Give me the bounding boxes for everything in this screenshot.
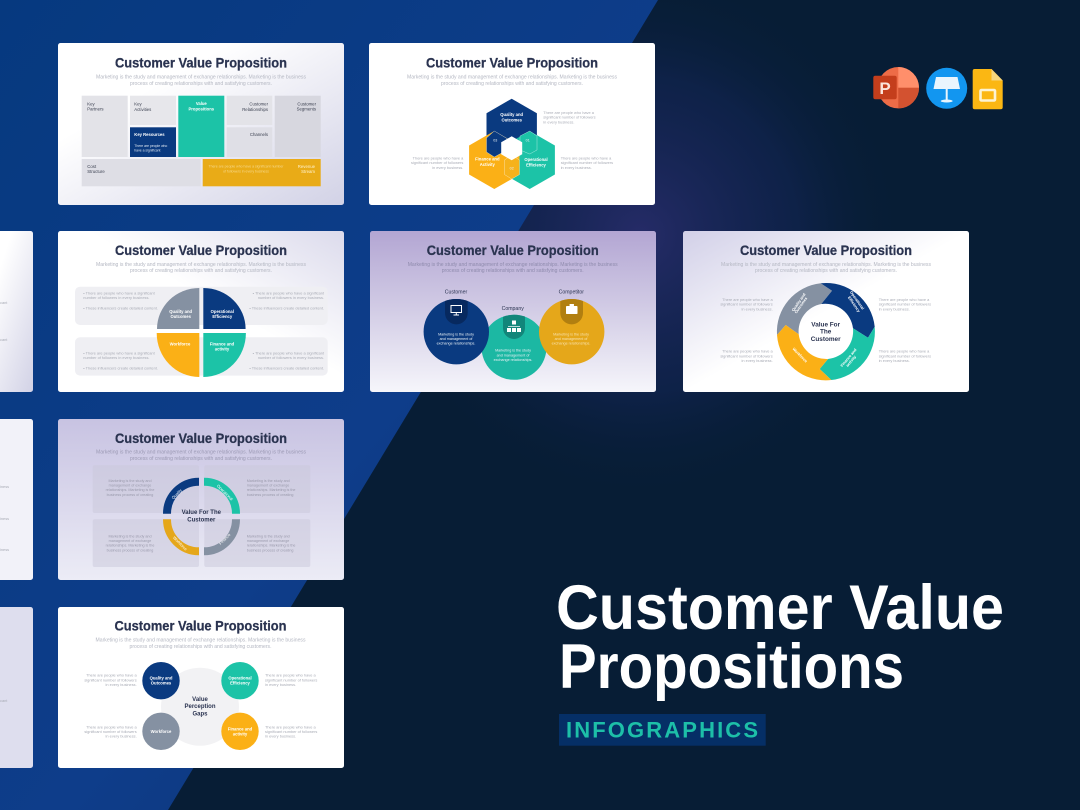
slide title: Customer Value Proposition bbox=[114, 618, 286, 634]
slide subtitle bbox=[96, 638, 306, 650]
arc: workforce bbox=[167, 519, 199, 551]
note text: management of exchange bbox=[109, 539, 151, 543]
notes: significant number of followers bbox=[265, 729, 317, 734]
main title bbox=[556, 573, 1004, 702]
canvas: key partners: Partners bbox=[87, 106, 104, 112]
pie labels: Operational bbox=[211, 309, 234, 314]
hexagon labels: Activity bbox=[480, 162, 496, 167]
partial slide: left row 3 bbox=[0, 419, 33, 580]
circle: customer: and management of bbox=[440, 337, 473, 341]
ring notes bbox=[720, 297, 931, 363]
canvas: key activities: Key bbox=[134, 102, 143, 106]
hexagon notes: in every business. bbox=[543, 119, 574, 124]
main title: Propositions bbox=[559, 632, 904, 702]
circle: workforce: Workforce bbox=[151, 729, 172, 734]
ring labels: Operational bbox=[849, 290, 865, 310]
center label: Perception bbox=[184, 704, 216, 710]
center label: Value bbox=[192, 697, 208, 703]
ring: quality and outcomes bbox=[777, 283, 832, 335]
canvas: customer relationships: Customer bbox=[249, 102, 269, 106]
hexagon labels: Outcomes bbox=[501, 118, 523, 122]
slide subtitle: process of creating relationships with and satisfying customers. bbox=[130, 81, 272, 87]
note text: business process of creating bbox=[247, 493, 293, 497]
notes bbox=[84, 673, 317, 739]
hexagon labels: 01 bbox=[526, 138, 530, 142]
partial slide: left row 4 bbox=[0, 607, 33, 768]
slide subtitle: Marketing is the study and management of exchange relationships. Marketing is the business bbox=[96, 638, 306, 644]
canvas: revenue streams: Stream bbox=[301, 169, 315, 174]
canvas: value propositions: Value bbox=[196, 101, 207, 106]
notes: There are people who have a bbox=[86, 673, 138, 678]
arc center label: Value For The bbox=[182, 510, 222, 516]
ring center label: The bbox=[820, 329, 832, 336]
circle: operational efficiency bbox=[221, 662, 259, 699]
arc labels: Quality bbox=[170, 488, 183, 500]
note text: Marketing is the study and bbox=[247, 479, 290, 483]
circle: workforce bbox=[142, 713, 180, 750]
circle headings bbox=[445, 290, 584, 312]
ring labels: Quality and bbox=[790, 292, 807, 312]
canvas: cost structure bbox=[82, 159, 201, 186]
circle: customer bbox=[424, 295, 489, 364]
note text bbox=[106, 479, 295, 552]
hexagon notes: in every business. bbox=[561, 165, 592, 170]
notes: There are people who have a bbox=[265, 673, 316, 678]
notes: in every business. bbox=[265, 734, 296, 739]
slide title: Customer Value Proposition bbox=[740, 243, 912, 258]
ring: operational efficiency bbox=[821, 283, 875, 338]
hexagon overlaps bbox=[486, 131, 537, 179]
pie: operational efficiency bbox=[203, 288, 246, 329]
icon: powerpoint: P bbox=[879, 79, 891, 98]
note text: management of exchange bbox=[247, 539, 289, 543]
canvas: key partners: Key bbox=[87, 102, 96, 106]
circle: competitor bbox=[539, 295, 604, 364]
arc labels: Workforce bbox=[172, 535, 189, 552]
infographics badge: INFOGRAPHICS bbox=[566, 718, 758, 743]
icon: keynote bbox=[926, 68, 967, 109]
hexagon labels: Finance and bbox=[475, 156, 500, 162]
note text: business process of creating bbox=[107, 548, 153, 552]
canvas: cost structure: Cost bbox=[87, 164, 97, 169]
canvas: value propositions: Propositions bbox=[189, 106, 215, 112]
icon: powerpoint bbox=[873, 67, 919, 108]
slide subtitle bbox=[407, 74, 617, 87]
canvas: key resources: have a significant bbox=[134, 148, 161, 152]
ring labels: activity bbox=[845, 354, 858, 368]
ring notes: There are people who have a bbox=[879, 349, 930, 354]
arc: quality bbox=[167, 482, 199, 514]
ring notes: significant number of followers bbox=[720, 302, 773, 307]
note text: relationships. Marketing is the bbox=[106, 544, 154, 548]
canvas: key partners bbox=[82, 96, 128, 157]
arc center label: Customer bbox=[187, 518, 216, 524]
ring notes: significant number of followers bbox=[879, 353, 931, 358]
canvas: channels: Channels bbox=[250, 132, 268, 137]
note text: • There are people who have a significant bbox=[83, 350, 156, 355]
ring notes: in every business. bbox=[742, 358, 773, 363]
pie: workforce bbox=[157, 333, 199, 377]
slide subtitle bbox=[96, 450, 306, 462]
slide: overlapping circles bbox=[370, 231, 656, 392]
center label: Gaps bbox=[192, 711, 208, 717]
pie labels bbox=[169, 309, 235, 352]
ring labels: Workforce bbox=[792, 346, 809, 364]
slide: quarter arcs bbox=[58, 419, 344, 580]
canvas: revenue streams: of followers in every business bbox=[223, 170, 269, 174]
canvas: channels bbox=[227, 127, 272, 157]
slide subtitle: process of creating relationships with and satisfying customers. bbox=[130, 644, 272, 650]
arc labels: Operational bbox=[216, 483, 234, 502]
slide subtitle bbox=[96, 262, 306, 274]
notes: significant number of followers bbox=[265, 677, 317, 682]
note text: • There are people who have a significant bbox=[83, 290, 156, 295]
canvas: value propositions bbox=[178, 96, 224, 157]
arc center label bbox=[182, 510, 222, 524]
note panels bbox=[75, 287, 328, 376]
note text: business process of creating bbox=[247, 548, 293, 552]
partial slide: left row 2: cant bbox=[0, 300, 8, 305]
pie: finance and activity bbox=[203, 333, 246, 377]
partial slide: left row 3: iness bbox=[0, 516, 9, 521]
slide title: Customer Value Proposition bbox=[115, 56, 287, 70]
ring labels: Finance and bbox=[839, 347, 858, 368]
note text: • There are people who have a significant bbox=[253, 290, 325, 295]
canvas: customer segments: Customer bbox=[297, 102, 317, 106]
note text: • There are people who have a significant bbox=[253, 350, 325, 355]
hexagon notes: in every business. bbox=[432, 165, 463, 170]
canvas: key activities: Activities bbox=[134, 107, 151, 112]
note panels bbox=[93, 465, 310, 567]
note text: number of followers in every business. bbox=[258, 355, 324, 360]
circle: company: Marketing is the study bbox=[495, 349, 531, 353]
ring notes: in every business. bbox=[879, 358, 910, 363]
slide title: Customer Value Proposition bbox=[115, 243, 287, 258]
pie labels: Efficiency bbox=[212, 314, 233, 319]
center circle bbox=[161, 668, 239, 746]
note text: management of exchange bbox=[109, 484, 151, 488]
ring notes: significant number of followers bbox=[879, 302, 931, 307]
main title: Customer Value bbox=[556, 573, 1004, 643]
note text: • These influencers create detailed content. bbox=[249, 306, 324, 310]
circle: company: and management of bbox=[497, 354, 530, 358]
slide title: Customer Value Proposition bbox=[427, 243, 599, 258]
slide subtitle: process of creating relationships with and satisfying customers. bbox=[755, 268, 897, 274]
hexagon notes: There are people who have a bbox=[543, 110, 595, 115]
note text: relationships. Marketing is the bbox=[247, 544, 295, 548]
notes: in every business. bbox=[106, 734, 137, 739]
slide subtitle bbox=[408, 262, 618, 274]
hexagon labels: Quality and bbox=[500, 112, 524, 117]
note text: number of followers in every business. bbox=[83, 355, 149, 360]
slide subtitle bbox=[96, 74, 306, 87]
circle headings: Company bbox=[502, 306, 524, 312]
slide subtitle: Marketing is the study and management of exchange relationships. Marketing is the business bbox=[407, 74, 617, 80]
note text: relationships. Marketing is the bbox=[106, 488, 154, 492]
circle headings: Competitor bbox=[559, 290, 584, 296]
circle: operational efficiency: Efficiency bbox=[230, 681, 251, 686]
slide subtitle: process of creating relationships with and satisfying customers. bbox=[442, 268, 584, 274]
hexagon notes bbox=[411, 110, 613, 170]
ring center label: Value For bbox=[811, 322, 841, 328]
canvas: revenue streams: Revenue bbox=[298, 164, 316, 169]
hexagon: center bbox=[501, 136, 522, 160]
notes: There are people who have a bbox=[265, 724, 316, 729]
canvas: customer relationships bbox=[227, 96, 272, 125]
ring notes: There are people who have a bbox=[879, 297, 930, 302]
canvas: customer segments: Segments bbox=[297, 106, 316, 112]
arc: finance bbox=[204, 519, 236, 551]
circle headings: Customer bbox=[445, 290, 468, 296]
ring labels: Outcomes bbox=[793, 296, 808, 314]
hexagon notes: significant number of followers bbox=[411, 160, 463, 165]
note text: Marketing is the study and bbox=[247, 534, 290, 538]
pie labels: Quality and bbox=[169, 309, 193, 314]
slide: hexagon diagram bbox=[369, 43, 655, 205]
note text: number of followers in every business. bbox=[258, 295, 324, 300]
note text: Marketing is the study and bbox=[108, 534, 152, 538]
hexagon notes: There are people who have a bbox=[561, 156, 612, 160]
note text: • These influencers create detailed content. bbox=[249, 366, 324, 370]
canvas: customer segments bbox=[275, 96, 321, 157]
ring notes: There are people who have a bbox=[722, 297, 774, 302]
ring notes: significant number of followers bbox=[720, 353, 773, 358]
notes: in every business. bbox=[106, 682, 137, 687]
note text: • These influencers create detailed content. bbox=[83, 306, 158, 310]
hexagon: operational efficiency bbox=[504, 131, 555, 189]
note text: number of followers in every business. bbox=[83, 295, 149, 300]
pie labels: Workforce bbox=[170, 341, 191, 346]
hexagon labels: 03 bbox=[493, 138, 497, 142]
partial slide: left row 2: cant bbox=[0, 337, 8, 342]
hexagon labels: Efficiency bbox=[526, 162, 547, 168]
slide: arrow ring bbox=[683, 231, 969, 392]
slide subtitle: Marketing is the study and management of exchange relationships. Marketing is the business bbox=[721, 262, 931, 268]
slide title: Customer Value Proposition bbox=[115, 431, 287, 446]
circle: finance and activity bbox=[221, 713, 259, 750]
ring notes: in every business. bbox=[742, 306, 773, 311]
canvas: revenue streams: There are people who have a significant number bbox=[209, 164, 284, 168]
partial slide: left row 3: iness bbox=[0, 547, 9, 552]
slide subtitle: Marketing is the study and management of exchange relationships. Marketing is the business bbox=[96, 74, 306, 80]
note text: business process of creating bbox=[107, 493, 153, 497]
pie labels: activity bbox=[215, 346, 230, 352]
slide: quadrant pie bbox=[58, 231, 344, 392]
notes: in every business. bbox=[265, 682, 296, 687]
canvas: key resources bbox=[130, 127, 176, 157]
slide subtitle: Marketing is the study and management of exchange relationships. Marketing is the business bbox=[96, 262, 306, 268]
hexagon notes: There are people who have a bbox=[413, 156, 464, 160]
hexagon labels bbox=[475, 112, 548, 171]
circle: company bbox=[482, 310, 546, 380]
slide: business model canvas bbox=[58, 43, 344, 205]
circle: competitor: exchange relationships. bbox=[552, 342, 590, 346]
circle: company: exchange relationships. bbox=[494, 358, 532, 362]
center label bbox=[184, 697, 216, 717]
note text: Marketing is the study and bbox=[108, 479, 152, 483]
pie: quality and outcomes bbox=[157, 288, 199, 329]
ring labels bbox=[790, 290, 865, 368]
slide subtitle: Marketing is the study and management of exchange relationships. Marketing is the business bbox=[96, 450, 306, 456]
ring: workforce bbox=[777, 325, 831, 380]
ring center label bbox=[811, 322, 841, 343]
notes: significant number of followers bbox=[84, 729, 137, 734]
canvas: key resources: There are people who bbox=[134, 144, 167, 148]
canvas: key resources: Key Resources bbox=[134, 132, 165, 137]
canvas: cost structure: Structure bbox=[87, 169, 105, 174]
hexagon labels: 02 bbox=[510, 167, 514, 171]
hexagon notes: significant number of followers bbox=[543, 115, 596, 120]
hexagon labels: Operational bbox=[524, 157, 548, 162]
icon: google slides bbox=[973, 69, 1003, 109]
note text: relationships. Marketing is the bbox=[247, 488, 295, 492]
circle: operational efficiency: Operational bbox=[228, 676, 252, 680]
slide subtitle: Marketing is the study and management of exchange relationships. Marketing is the business bbox=[408, 262, 618, 268]
note text: management of exchange bbox=[247, 484, 289, 488]
slide title: Customer Value Proposition bbox=[426, 56, 598, 70]
hexagon notes: significant number of followers bbox=[561, 160, 613, 165]
partial slide: left row 4: cant bbox=[0, 698, 8, 703]
ring notes: There are people who have a bbox=[722, 349, 774, 354]
slide subtitle: process of creating relationships with and satisfying customers. bbox=[130, 456, 272, 462]
pie labels: Outcomes bbox=[170, 314, 192, 319]
circle: quality and outcomes: Quality and bbox=[150, 676, 173, 680]
circle: finance and activity: activity bbox=[233, 732, 248, 736]
canvas: revenue streams bbox=[203, 159, 321, 186]
slide subtitle: process of creating relationships with and satisfying customers. bbox=[130, 268, 272, 274]
hexagon: finance and activity bbox=[469, 131, 520, 189]
ring: finance and activity bbox=[820, 327, 875, 380]
ring labels: Efficiency bbox=[847, 295, 862, 314]
hexagon: quality and outcomes bbox=[486, 99, 537, 157]
pie labels: Finance and bbox=[210, 341, 235, 346]
note text: • These influencers create detailed content. bbox=[83, 366, 158, 370]
circle: customer: exchange relationships. bbox=[437, 342, 475, 346]
canvas: key activities bbox=[130, 96, 176, 125]
slide: value perception gaps bbox=[58, 607, 344, 768]
circle: quality and outcomes bbox=[142, 662, 180, 699]
partial slide: left row 2 bbox=[0, 231, 33, 392]
notes: significant number of followers bbox=[84, 677, 137, 682]
circle: competitor: Marketing is the study bbox=[553, 332, 589, 336]
ring notes: in every business. bbox=[879, 306, 910, 311]
ring center label: Customer bbox=[811, 336, 841, 343]
arc: operational bbox=[204, 482, 236, 514]
arc labels: Finance bbox=[218, 532, 232, 546]
arc labels bbox=[170, 483, 234, 552]
circle: finance and activity: Finance and bbox=[228, 726, 253, 731]
circle: customer: Marketing is the study bbox=[438, 332, 474, 336]
slide subtitle: process of creating relationships with and satisfying customers. bbox=[441, 81, 583, 87]
partial slide: left row 3: iness bbox=[0, 484, 9, 489]
slide subtitle bbox=[721, 262, 931, 274]
circle: competitor: and management of bbox=[555, 337, 588, 341]
notes: There are people who have a bbox=[86, 724, 138, 729]
canvas: customer relationships: Relationships bbox=[242, 107, 268, 112]
note text bbox=[83, 290, 325, 370]
circle: quality and outcomes: Outcomes bbox=[151, 681, 172, 686]
